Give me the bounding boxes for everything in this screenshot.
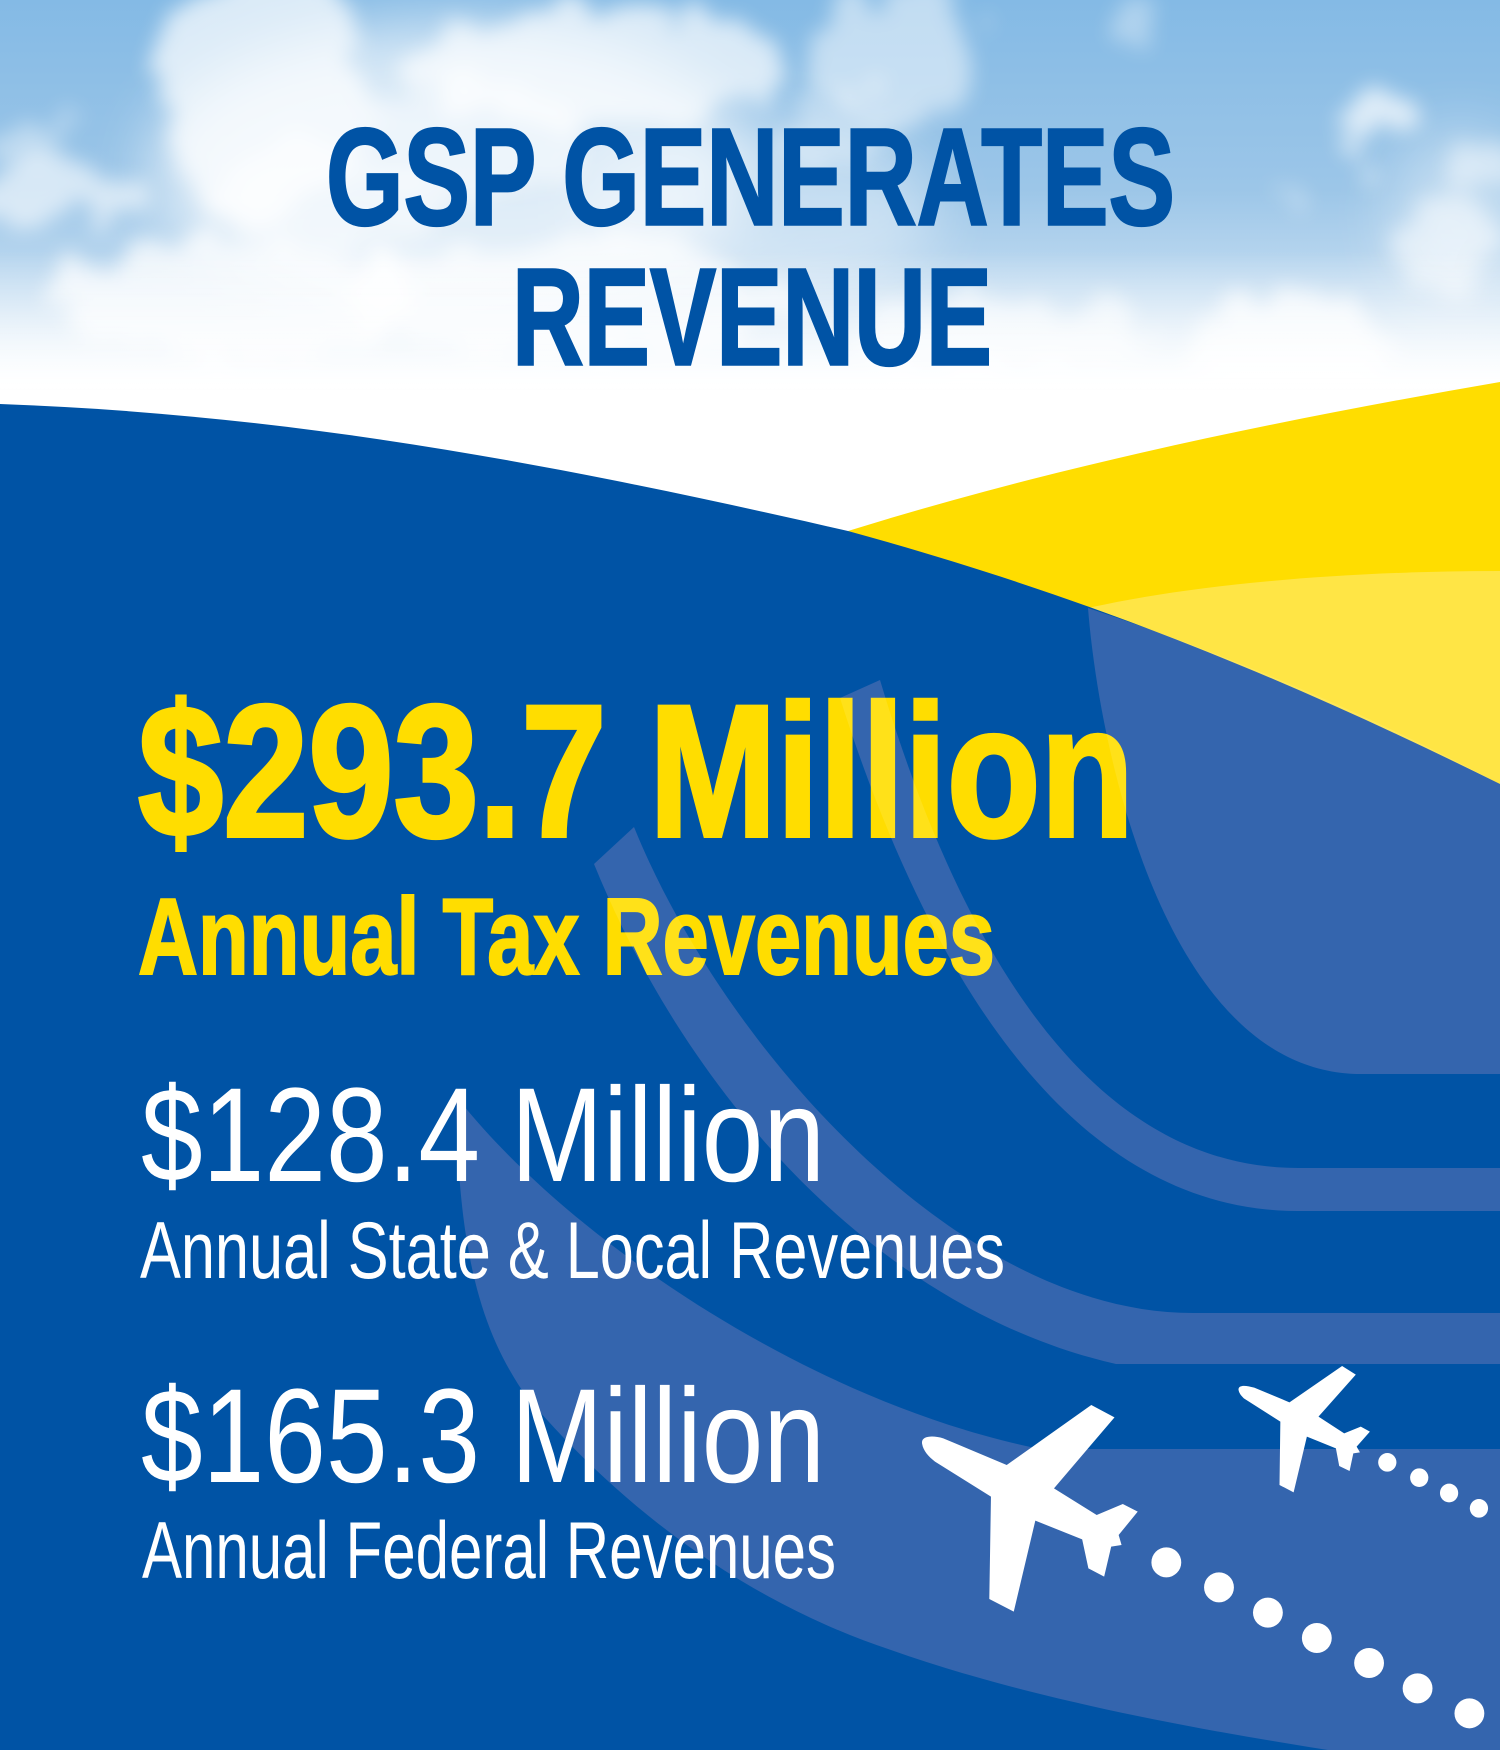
yellow hill [848, 382, 1500, 800]
icon: small airplane [1238, 1366, 1370, 1492]
light yellow hill highlight [1088, 571, 1500, 800]
dotted flight trail: large airplane [1151, 1547, 1484, 1728]
sky background with clouds [0, 0, 1500, 600]
dotted flight trail: small airplane [1378, 1453, 1488, 1518]
title: GSP GENERATES [326, 100, 1175, 254]
flight path swooshes [456, 608, 1500, 1750]
stat: federal revenues: Annual Federal Revenues [142, 1506, 836, 1596]
icon: large airplane [922, 1405, 1138, 1612]
stat: annual tax revenues [138, 666, 1134, 998]
stat: state and local revenues: $128.4 Million [141, 1061, 825, 1210]
stat: state and local revenues [140, 1061, 1005, 1296]
stat: federal revenues [141, 1362, 836, 1596]
title: REVENUE [512, 240, 992, 394]
stat: state and local revenues: Annual State & Local Revenues [140, 1206, 1005, 1296]
title [326, 100, 1175, 394]
stat: annual tax revenues: Annual Tax Revenues [138, 876, 995, 998]
blue hill background [0, 404, 1500, 1750]
stat: federal revenues: $165.3 Million [141, 1362, 825, 1511]
stat: annual tax revenues: $293.7 Million [138, 666, 1134, 876]
